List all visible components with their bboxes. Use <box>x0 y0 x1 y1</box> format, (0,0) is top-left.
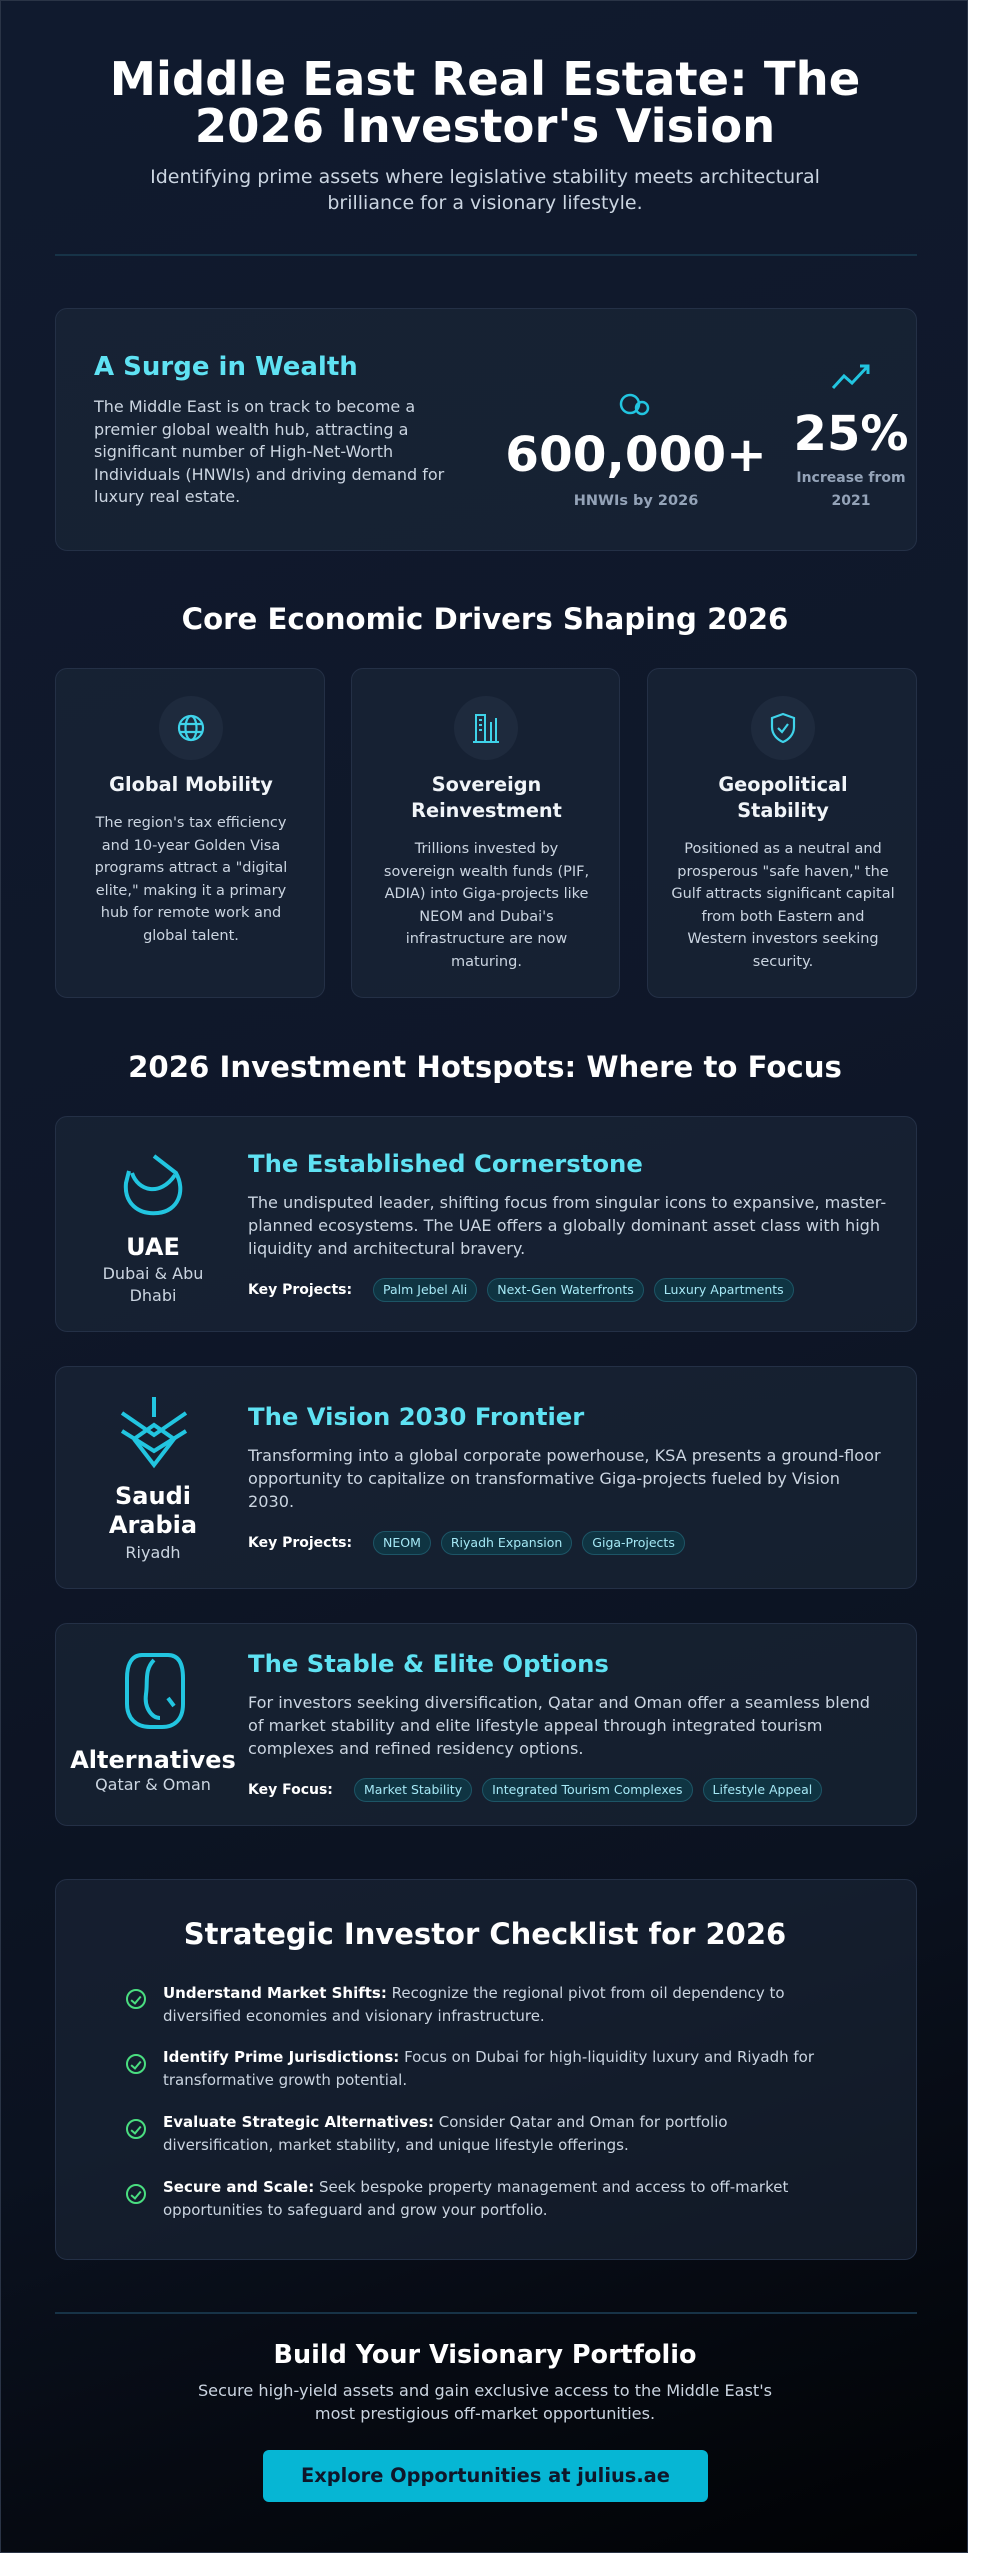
heading: build portfolio: Build Your Visionary Portfolio <box>274 2340 696 2370</box>
sublabel: dubai <box>103 1264 203 1305</box>
title: sovereign: Reinvestment <box>411 799 562 822</box>
label: increase <box>796 470 906 509</box>
checklist items: Understand Market Shifts: Recognize the regional pivot from oil dependency to diversified economies and visionary infrastructure. <box>163 1984 785 2025</box>
text: cta: most prestigious off-market opportunities. <box>315 2404 655 2423</box>
checklist items: Identify Prime Jurisdictions: Focus on Dubai for high-liquidity luxury and Riyadh for transformative growth potential. <box>163 2048 814 2089</box>
icon: globe <box>159 696 223 760</box>
button: explore <box>263 2450 708 2502</box>
tags: uae: Luxury Apartments <box>664 1282 784 1297</box>
item 3 <box>126 2113 728 2154</box>
tags: alternatives: Lifestyle Appeal <box>713 1782 812 1797</box>
title: 2026 Investor's Vision <box>195 99 775 153</box>
tags: ksa: NEOM <box>383 1535 421 1550</box>
icon: coins <box>620 394 650 416</box>
item 1 <box>126 1984 785 2025</box>
sublabel: riyadh: Riyadh <box>125 1543 181 1562</box>
subtitle <box>150 166 820 214</box>
label: increase: Increase from <box>796 470 906 486</box>
heading: hotspots: 2026 Investment Hotspots: Where to Focus <box>128 1050 842 1084</box>
tags: alternatives: Integrated Tourism Complexes <box>492 1782 683 1797</box>
panel: global mobility <box>55 668 325 998</box>
text: geopolitical: Positioned as a neutral and prosperous "safe haven," the Gulf attracts significant capital from both Eastern and Western investors seeking security. <box>671 841 895 970</box>
text: vision 2030: 2030. <box>248 1492 294 1511</box>
tags: uae: Palm Jebel Ali <box>383 1282 467 1297</box>
text: cta: Secure high-yield assets and gain exclusive access to the Middle East's <box>198 2381 772 2400</box>
sublabel: dubai: Dhabi <box>130 1286 176 1305</box>
sublabel: dubai: Dubai & Abu <box>103 1264 203 1283</box>
icon: trend <box>832 364 870 389</box>
panel: sovereign <box>351 668 620 998</box>
tags: ksa: Giga-Projects <box>592 1535 675 1550</box>
button: explore: Explore Opportunities at julius.ae <box>301 2464 670 2487</box>
title <box>110 52 860 153</box>
title: geopolitical: Geopolitical <box>718 773 848 796</box>
checklist items: Secure and Scale: Seek bespoke property management and access to off-market opportunities to safeguard and grow your portfolio. <box>163 2178 788 2219</box>
title: geopolitical: Stability <box>737 799 829 822</box>
text: stable elite: For investors seeking diversification, Qatar and Oman offer a seamless blend <box>248 1693 870 1712</box>
tags: ksa: Riyadh Expansion <box>451 1535 562 1550</box>
stat: 25%: 25% <box>794 406 908 462</box>
tags: uae: Next-Gen Waterfronts <box>497 1282 634 1297</box>
panel: checklist <box>55 1879 917 2260</box>
icon: shield <box>751 696 815 760</box>
subtitle: brilliance for a visionary lifestyle. <box>327 192 643 214</box>
item 4 <box>126 2178 788 2219</box>
heading: stable elite: The Stable & Elite Options <box>248 1649 609 1678</box>
sublabel: qatar oman: Qatar & Oman <box>95 1775 211 1794</box>
title: Middle East Real Estate: The <box>110 52 860 106</box>
icon: alternatives <box>125 1653 185 1729</box>
text: stable elite <box>248 1693 870 1758</box>
heading: core drivers: Core Economic Drivers Shaping 2026 <box>182 602 788 636</box>
label: saudi: Arabia <box>109 1511 197 1539</box>
tags: uae: Key Projects: <box>248 1282 352 1298</box>
checklist items: diversification, market stability, and unique lifestyle offerings. <box>163 2136 629 2154</box>
label: alternatives: Alternatives <box>70 1746 236 1774</box>
tags: alternatives: Key Focus: <box>248 1782 333 1798</box>
subtitle: Identifying prime assets where legislative stability meets architectural <box>150 166 820 188</box>
heading: checklist: Strategic Investor Checklist for 2026 <box>184 1917 786 1951</box>
text: established: The undisputed leader, shifting focus from singular icons to expansive, master-planned ecosystems. The UAE offers a globally dominant asset class with high liquidity and architectural bravery. <box>248 1193 886 1258</box>
label: saudi <box>109 1482 197 1539</box>
text: vision 2030: Transforming into a global corporate powerhouse, KSA presents a ground-floor opportunity to capitalize on transformative Giga-projects fueled by Vision <box>248 1446 881 1488</box>
icon: uae <box>124 1154 182 1216</box>
item 2 <box>126 2048 814 2089</box>
tags: ksa: Key Projects: <box>248 1535 352 1551</box>
text: sovereign: Trillions invested by sovereign wealth funds (PIF, ADIA) into Giga-projects like NEOM and Dubai's infrastructure are now maturing. <box>384 841 589 970</box>
tags: ksa <box>248 1531 685 1555</box>
text: global mobility: The region's tax efficiency and 10-year Golden Visa programs attract a "digital elite," making it a primary hub for remote work and global talent. <box>95 815 287 944</box>
tags: alternatives <box>248 1778 822 1802</box>
label: hnwis: HNWIs by 2026 <box>574 493 698 509</box>
icon: ksa <box>120 1397 188 1468</box>
label: saudi: Saudi <box>115 1482 191 1510</box>
icon: buildings <box>454 696 518 760</box>
text: stable elite: complexes and refined residency options. <box>248 1739 583 1758</box>
title: geopolitical <box>718 773 848 822</box>
panel: UAE <box>55 1116 917 1332</box>
tags: alternatives: Market Stability <box>364 1782 462 1797</box>
title: sovereign <box>411 773 562 822</box>
stat: 600000: 600,000+ <box>505 427 767 483</box>
heading: vision 2030: The Vision 2030 Frontier <box>248 1402 584 1431</box>
heading: established: The Established Cornerstone <box>248 1149 643 1178</box>
text: vision 2030 <box>248 1446 881 1511</box>
title: sovereign: Sovereign <box>432 773 541 796</box>
checklist items <box>126 1984 814 2219</box>
heading: surge: A Surge in Wealth <box>94 352 358 382</box>
text: surge: The Middle East is on track to become a premier global wealth hub, attracting a significant number of High-Net-Worth Individuals (HNWIs) and driving demand for luxury real estate. <box>94 397 444 506</box>
label: UAE: UAE <box>126 1233 180 1261</box>
text: stable elite: of market stability and elite lifestyle appeal through integrated tourism <box>248 1716 822 1735</box>
checklist items: Evaluate Strategic Alternatives: Consider Qatar and Oman for portfolio <box>163 2113 728 2131</box>
panel: KSA <box>55 1366 917 1589</box>
title: global mobility: Global Mobility <box>109 773 273 796</box>
text: cta <box>198 2381 772 2423</box>
label: increase: 2021 <box>832 493 870 509</box>
panel: alternatives <box>55 1623 917 1826</box>
panel: surge in wealth <box>55 308 917 551</box>
panel: geopolitical <box>647 668 917 998</box>
tags: uae <box>248 1278 794 1302</box>
